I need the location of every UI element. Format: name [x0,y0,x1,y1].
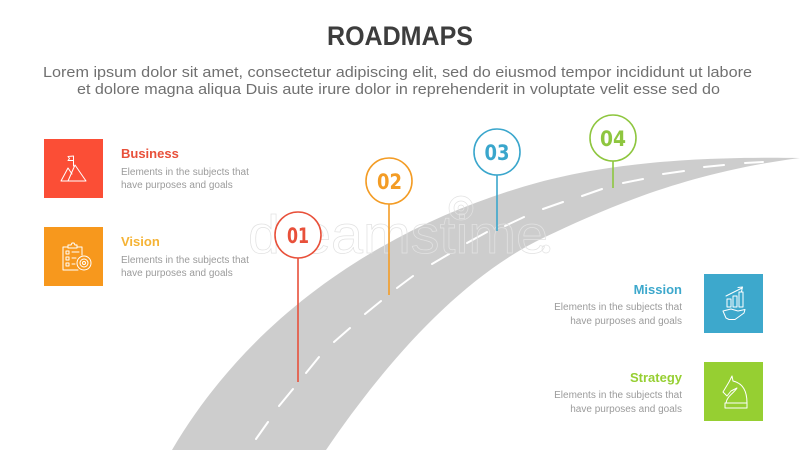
subtitle: Lorem ipsum dolor sit amet, consectetur adipiscing elit, sed do eiusmod tempor incididunt ut labore [43,64,752,81]
road centre dashes [256,162,763,439]
item: Strategy [554,362,763,421]
marker 04: 04 [600,127,626,151]
item: Vision: Elements in the subjects that [121,255,249,266]
item: Mission: Elements in the subjects that [554,302,682,313]
icon: mountain flag [44,139,103,198]
item: Vision: have purposes and goals [121,268,233,279]
item: Mission [554,274,763,333]
marker 04 [590,115,636,188]
subtitle: et dolore magna aliqua Duis aute irure dolor in reprehenderit in voluptate velit esse sed do [77,81,720,98]
item: Mission: have purposes and goals [570,316,682,327]
marker 03 [474,129,520,231]
item: Business: Business [121,146,179,161]
item: Vision [44,227,249,286]
icon: clipboard target [44,227,103,286]
item: Business: have purposes and goals [121,180,233,191]
item: Business: Elements in the subjects that [121,167,249,178]
item: Mission: Mission [634,282,682,297]
title: ROADMAPS [327,21,473,51]
marker 01: 01 [287,224,309,248]
icon: hand growth chart [704,274,763,333]
item: Strategy: Elements in the subjects that [554,390,682,401]
subtitle [43,64,752,98]
road [172,158,800,450]
marker 03: 03 [484,141,510,165]
item: Strategy: Strategy [630,370,683,385]
marker 02: 02 [377,170,402,194]
marker 01 [275,212,321,382]
watermark: dreamstime [248,205,548,265]
item: Business [44,139,249,198]
icon: chess knight [704,362,763,421]
marker 02 [366,158,412,295]
item: Strategy: have purposes and goals [570,404,682,415]
item: Vision: Vision [121,234,160,249]
